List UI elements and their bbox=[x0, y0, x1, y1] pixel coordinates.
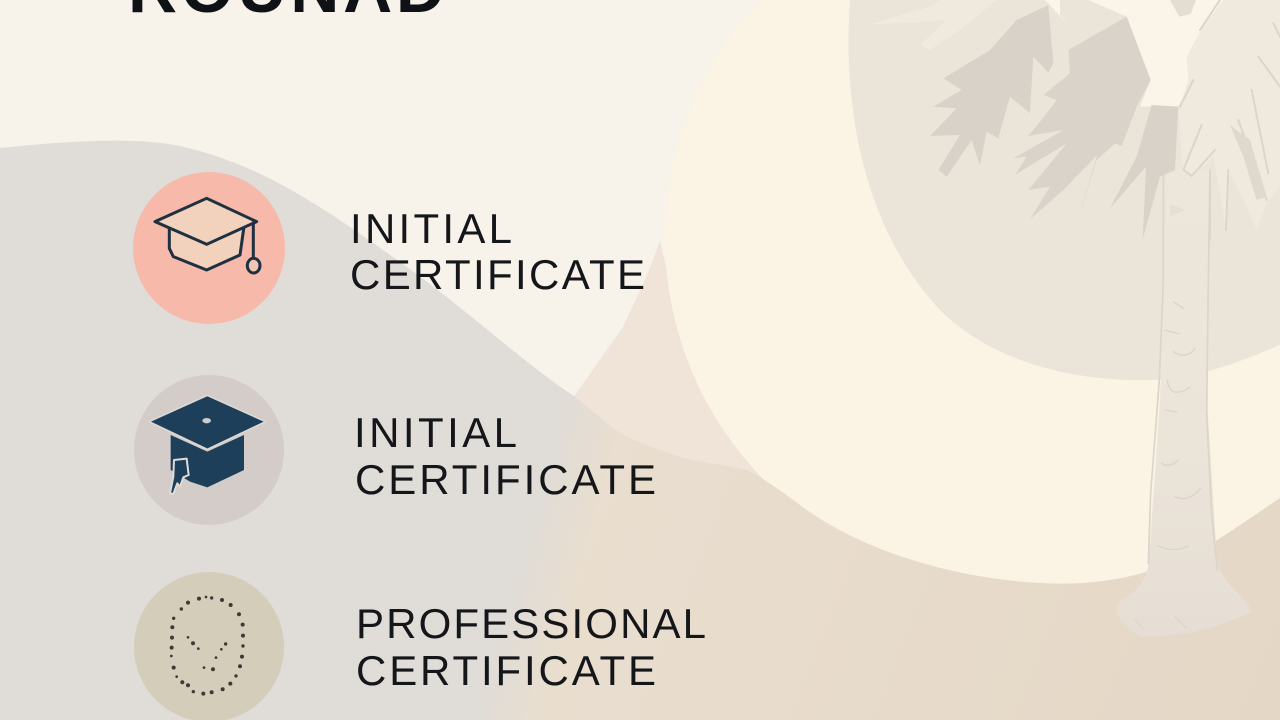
label: PROFESSIONAL bbox=[356, 600, 706, 647]
central and right fronds bbox=[1013, 0, 1280, 240]
background: beige ground bbox=[420, 285, 1280, 720]
icon: solid graduation cap bbox=[134, 375, 284, 525]
label: CERTIFICATE bbox=[355, 456, 656, 503]
dark frond centre bbox=[1013, 17, 1151, 219]
label: CERTIFICATE bbox=[356, 647, 656, 694]
dark frond lower bbox=[1110, 105, 1178, 239]
item 3: professional certificate bbox=[134, 572, 706, 720]
crown highlight bbox=[1045, 0, 1223, 107]
background: pale disc behind palm bbox=[848, 0, 1280, 380]
label: CERTIFICATE bbox=[350, 251, 645, 298]
trunk bark marks bbox=[1135, 170, 1217, 628]
right light frond bbox=[1178, 0, 1280, 230]
gap between left and centre fronds bbox=[1045, 0, 1070, 27]
background: distant peak bbox=[570, 240, 800, 505]
palm trunk bbox=[1117, 170, 1252, 636]
small top frond bbox=[1170, 0, 1196, 17]
illustration: palm tree bbox=[867, 0, 1280, 636]
background: cream sun bbox=[665, 0, 1280, 583]
icon: dotted seal bbox=[134, 572, 284, 720]
shaded vein bbox=[1230, 125, 1267, 200]
background: grey hill bbox=[0, 141, 630, 720]
upper left light frond bbox=[867, 0, 997, 50]
label: INITIAL bbox=[350, 205, 512, 252]
small frond mark bbox=[1170, 203, 1185, 217]
label: INITIAL bbox=[354, 409, 517, 456]
palm fronds bbox=[867, 0, 1053, 177]
dark frond left bbox=[930, 5, 1053, 177]
item 1: initial certificate bbox=[133, 172, 645, 324]
item 2: initial certificate bbox=[134, 375, 656, 525]
icon: outlined graduation cap bbox=[133, 172, 285, 324]
frond veins bbox=[1180, 0, 1280, 240]
